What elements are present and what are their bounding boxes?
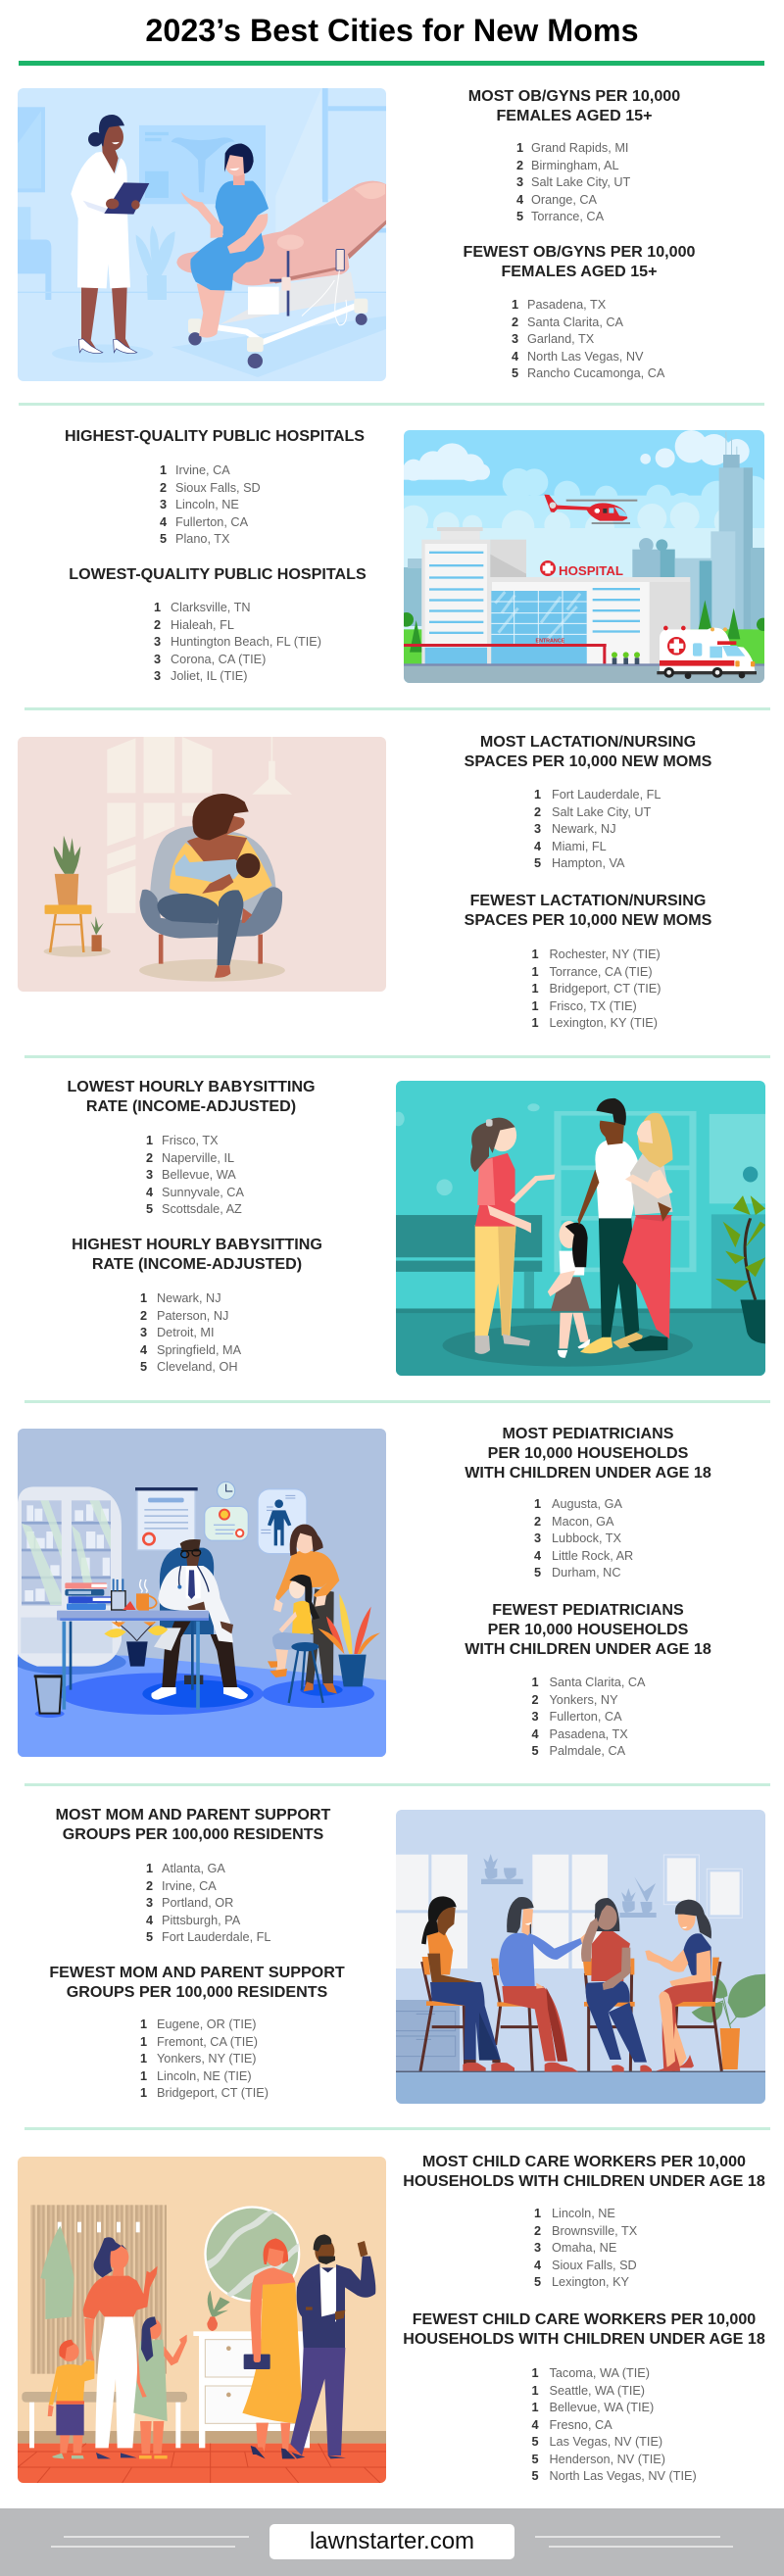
books	[65, 1582, 111, 1610]
heading: most support groups: MOST MOM AND PARENT SUPPORT	[56, 1806, 330, 1823]
heading: fewest support groups: FEWEST MOM AND PARENT SUPPORT	[49, 1964, 345, 1981]
list: fewest support groups: 1	[140, 2069, 147, 2083]
list: fewest OB/GYNs: Santa Clarita, CA	[527, 316, 623, 329]
list: most lactation spaces: 3	[534, 822, 541, 836]
list: fewest lactation spaces: 1	[531, 999, 539, 1013]
list: most lactation spaces	[534, 788, 661, 870]
list: most support groups: Pittsburgh, PA	[162, 1914, 240, 1927]
potted flower	[104, 1622, 168, 1667]
heading: most child care workers: HOUSEHOLDS WITH CHILDREN UNDER AGE 18	[403, 2172, 765, 2190]
list: fewest OB/GYNs: 1	[512, 298, 518, 312]
panel: OB/GYNs	[18, 87, 696, 381]
list: most pediatricians: Macon, GA	[552, 1515, 613, 1529]
list: fewest support groups: Lincoln, NE (TIE)	[157, 2069, 252, 2083]
list: highest babysitting rate: 1	[140, 1291, 147, 1305]
heading: most pediatricians: PER 10,000 HOUSEHOLDS	[488, 1444, 688, 1462]
panel: child care	[18, 2153, 765, 2483]
list: fewest pediatricians: 3	[531, 1710, 539, 1724]
list: most OB/GYNs: 5	[516, 210, 523, 223]
list: most pediatricians: Lubbock, TX	[552, 1531, 621, 1545]
heading: highest babysitting rate: HIGHEST HOURLY BABYSITTING	[72, 1236, 322, 1253]
panel: babysitting	[67, 1078, 765, 1376]
list: fewest lactation spaces: 1	[531, 965, 539, 979]
list: most child care workers: 1	[534, 2207, 541, 2220]
list: most pediatricians: Durham, NC	[552, 1566, 621, 1580]
dresser	[193, 2331, 310, 2448]
list: highest-quality hospitals: 5	[160, 532, 167, 546]
certificate	[205, 1506, 248, 1540]
list: most support groups: Portland, OR	[162, 1896, 233, 1910]
illustration: family with babysitter	[396, 1081, 765, 1376]
heading: most support groups: GROUPS PER 100,000 RESIDENTS	[63, 1825, 323, 1843]
list: fewest pediatricians: Yonkers, NY	[549, 1693, 618, 1707]
list: most pediatricians: Augusta, GA	[552, 1497, 622, 1511]
list: highest-quality hospitals: Lincoln, NE	[175, 498, 239, 511]
list: lowest-quality hospitals	[154, 601, 321, 683]
heading: fewest support groups: GROUPS PER 100,000 RESIDENTS	[67, 1983, 327, 2001]
list: lowest-quality hospitals: 3	[154, 669, 161, 683]
list: fewest pediatricians: 5	[531, 1744, 539, 1758]
list: most child care workers: 2	[534, 2224, 541, 2238]
list: fewest pediatricians: Pasadena, TX	[549, 1727, 628, 1741]
heading: fewest lactation spaces: FEWEST LACTATION/NURSING	[470, 892, 706, 909]
mother	[622, 1113, 672, 1351]
heading: most child care workers: MOST CHILD CARE WORKERS PER 10,000	[422, 2153, 746, 2170]
hanging coat	[40, 2226, 74, 2319]
list: fewest lactation spaces: Bridgeport, CT (TIE)	[549, 982, 661, 996]
patient	[181, 143, 269, 338]
list: most lactation spaces: 4	[534, 840, 541, 853]
heading: lowest babysitting rate: RATE (INCOME-ADJUSTED)	[86, 1097, 296, 1115]
list: most OB/GYNs	[516, 141, 630, 223]
list: most pediatricians: 3	[534, 1531, 541, 1545]
list: highest babysitting rate	[140, 1291, 241, 1374]
monstera plant	[692, 1974, 765, 2069]
list: most pediatricians	[534, 1497, 633, 1580]
list: lowest babysitting rate: Naperville, IL	[162, 1151, 234, 1165]
list: fewest lactation spaces: Frisco, TX (TIE)	[549, 999, 637, 1013]
list: fewest lactation spaces	[531, 948, 661, 1030]
list: fewest lactation spaces: Lexington, KY (TIE)	[549, 1016, 658, 1030]
list: lowest-quality hospitals: 3	[154, 635, 161, 649]
boy	[48, 2340, 94, 2458]
bench	[22, 2392, 187, 2448]
list: most support groups: Irvine, CA	[162, 1879, 217, 1893]
list: fewest support groups: Fremont, CA (TIE)	[157, 2035, 258, 2049]
doctor	[71, 115, 149, 354]
list: fewest OB/GYNs: Rancho Cucamonga, CA	[527, 366, 664, 380]
heading: most OB/GYNs: FEMALES AGED 15+	[496, 107, 653, 124]
exam chair	[176, 181, 386, 368]
list: lowest babysitting rate: Scottsdale, AZ	[162, 1202, 242, 1216]
list: fewest support groups: Bridgeport, CT (TIE)	[157, 2086, 269, 2100]
heading: most lactation spaces: SPACES PER 10,000 NEW MOMS	[465, 753, 711, 770]
list: fewest child care workers: 5	[531, 2453, 539, 2466]
list: lowest babysitting rate: 1	[146, 1134, 153, 1147]
list: most support groups: 2	[146, 1879, 153, 1893]
ambulance	[657, 626, 757, 679]
child	[548, 1221, 590, 1358]
list: most pediatricians: 2	[534, 1515, 541, 1529]
list: fewest child care workers: Fresno, CA	[549, 2418, 612, 2432]
list: fewest OB/GYNs: 3	[512, 332, 518, 346]
list: most support groups: 1	[146, 1862, 153, 1875]
list: most pediatricians: 1	[534, 1497, 541, 1511]
medicine cabinet	[18, 1486, 122, 1667]
list: highest babysitting rate: Detroit, MI	[157, 1326, 215, 1339]
list: fewest lactation spaces: Torrance, CA (TIE)	[549, 965, 653, 979]
heading: highest babysitting rate	[72, 1236, 322, 1273]
list: highest-quality hospitals	[160, 463, 261, 546]
list: fewest support groups: 1	[140, 2086, 147, 2100]
list: highest babysitting rate: Springfield, MA	[157, 1343, 241, 1357]
list: fewest lactation spaces: 1	[531, 982, 539, 996]
list: most lactation spaces: 2	[534, 805, 541, 819]
heading: fewest OB/GYNs: FEMALES AGED 15+	[501, 263, 658, 280]
potted plant	[318, 1593, 380, 1686]
list: highest babysitting rate: Cleveland, OH	[157, 1360, 238, 1374]
list: lowest-quality hospitals: Joliet, IL (TIE)	[171, 669, 247, 683]
list: lowest-quality hospitals: 3	[154, 653, 161, 666]
list: fewest OB/GYNs: North Las Vegas, NV	[527, 350, 643, 364]
list: most support groups	[146, 1862, 270, 1944]
heading: lowest babysitting rate: LOWEST HOURLY BABYSITTING	[67, 1078, 316, 1095]
heading: most pediatricians: MOST PEDIATRICIANS	[503, 1425, 673, 1442]
list: highest-quality hospitals: 4	[160, 515, 167, 529]
list: most lactation spaces: Hampton, VA	[552, 856, 625, 870]
list: fewest child care workers: 5	[531, 2435, 539, 2449]
heading: lowest-quality hospitals: LOWEST-QUALITY PUBLIC HOSPITALS	[69, 565, 367, 583]
list: most OB/GYNs: 2	[516, 159, 523, 172]
list: most lactation spaces: Salt Lake City, UT	[552, 805, 651, 819]
armchair	[139, 826, 282, 964]
list: fewest OB/GYNs: Garland, TX	[527, 332, 594, 346]
list: lowest-quality hospitals: Corona, CA (TIE)	[171, 653, 266, 666]
heading: fewest lactation spaces: SPACES PER 10,000 NEW MOMS	[465, 911, 711, 929]
list: fewest support groups: 1	[140, 2035, 147, 2049]
mother and baby	[157, 794, 272, 978]
heading: most child care workers	[403, 2153, 765, 2190]
panel: lactation	[18, 733, 711, 1030]
list: highest babysitting rate: 4	[140, 1343, 147, 1357]
list: fewest child care workers: 4	[531, 2418, 539, 2432]
list: highest babysitting rate: Paterson, NJ	[157, 1309, 228, 1323]
list: fewest child care workers: Tacoma, WA (TIE)	[549, 2366, 650, 2380]
list: most pediatricians: 5	[534, 1566, 541, 1580]
mother in white	[83, 2237, 158, 2458]
list: highest babysitting rate: Newark, NJ	[157, 1291, 221, 1305]
list: most child care workers: 4	[534, 2259, 541, 2272]
list: fewest pediatricians: Palmdale, CA	[549, 1744, 625, 1758]
panel: hospitals	[65, 427, 764, 683]
heading: highest-quality hospitals: HIGHEST-QUALITY PUBLIC HOSPITALS	[65, 427, 365, 445]
list: fewest support groups: 1	[140, 2017, 147, 2031]
list: highest-quality hospitals: 2	[160, 481, 167, 495]
list: fewest child care workers: North Las Vegas, NV (TIE)	[549, 2469, 697, 2483]
heading: most OB/GYNs: MOST OB/GYNS PER 10,000	[468, 87, 680, 105]
list: most support groups: Atlanta, GA	[162, 1862, 225, 1875]
list: lowest babysitting rate: 4	[146, 1186, 153, 1199]
list: most support groups: Fort Lauderdale, FL	[162, 1930, 270, 1944]
list: most child care workers: Omaha, NE	[552, 2241, 616, 2255]
list: most lactation spaces: 1	[534, 788, 541, 802]
list: fewest lactation spaces: Rochester, NY (TIE)	[549, 948, 661, 961]
desk	[57, 1611, 209, 1710]
title: 2023’s Best Cities for New Moms	[145, 13, 639, 48]
list: lowest-quality hospitals: Huntington Beach, FL (TIE)	[171, 635, 321, 649]
illustration: family at home	[18, 2157, 386, 2483]
list: most OB/GYNs: Torrance, CA	[531, 210, 604, 223]
plant	[715, 1195, 765, 1343]
list: most child care workers: 5	[534, 2275, 541, 2289]
list: fewest support groups: Yonkers, NY (TIE)	[157, 2052, 257, 2066]
list: fewest pediatricians: 2	[531, 1693, 539, 1707]
list: most lactation spaces: Fort Lauderdale, FL	[552, 788, 661, 802]
plant and stool	[45, 836, 104, 952]
illustration: nursing mother	[18, 737, 386, 992]
illustration: support group	[396, 1810, 765, 2104]
list: most support groups: 4	[146, 1914, 153, 1927]
list: highest babysitting rate: 2	[140, 1309, 147, 1323]
heading: most lactation spaces: MOST LACTATION/NURSING	[480, 733, 696, 751]
list: fewest OB/GYNs	[512, 298, 664, 380]
man in tuxedo	[290, 2234, 375, 2458]
list: fewest child care workers: 1	[531, 2366, 539, 2380]
heading: most support groups	[56, 1806, 331, 1843]
heading: fewest support groups	[49, 1964, 345, 2001]
list: lowest babysitting rate: 2	[146, 1151, 153, 1165]
list: lowest babysitting rate: Frisco, TX	[162, 1134, 219, 1147]
list: lowest-quality hospitals: 2	[154, 618, 161, 632]
daughter	[133, 2316, 187, 2458]
list: most pediatricians: 4	[534, 1549, 541, 1563]
heading: lowest babysitting rate	[67, 1078, 316, 1115]
heading: fewest pediatricians: FEWEST PEDIATRICIANS	[492, 1601, 684, 1619]
list: fewest lactation spaces: 1	[531, 948, 539, 961]
heading: fewest OB/GYNs: FEWEST OB/GYNS PER 10,000	[463, 243, 696, 261]
chairs	[420, 1962, 721, 2071]
list: most support groups: 5	[146, 1930, 153, 1944]
website badge: lawnstarter.com	[310, 2528, 474, 2554]
list: lowest-quality hospitals: Hialeah, FL	[171, 618, 234, 632]
list: lowest-quality hospitals: 1	[154, 601, 161, 614]
list: most OB/GYNs: Orange, CA	[531, 193, 597, 207]
heading: fewest child care workers: HOUSEHOLDS WITH CHILDREN UNDER AGE 18	[403, 2330, 765, 2348]
list: most child care workers: 3	[534, 2241, 541, 2255]
mother and child	[268, 1525, 339, 1703]
mirror	[204, 2206, 300, 2302]
list: highest babysitting rate: 3	[140, 1326, 147, 1339]
list: fewest OB/GYNs: 2	[512, 316, 518, 329]
list: most child care workers: Sioux Falls, SD	[552, 2259, 637, 2272]
list: most lactation spaces: 5	[534, 856, 541, 870]
woman 3	[581, 1898, 652, 2071]
doctor	[151, 1539, 248, 1700]
illustration: doctor and patient	[18, 88, 386, 381]
heading: most pediatricians: WITH CHILDREN UNDER AGE 18	[465, 1464, 711, 1482]
list: most OB/GYNs: Birmingham, AL	[531, 159, 619, 172]
heading: fewest pediatricians: WITH CHILDREN UNDER AGE 18	[465, 1640, 711, 1658]
heading: fewest lactation spaces	[465, 892, 711, 929]
heading: most pediatricians	[465, 1425, 711, 1482]
list: fewest child care workers: Seattle, WA (TIE)	[549, 2384, 645, 2398]
panel: support groups	[49, 1806, 765, 2104]
list: highest-quality hospitals: Plano, TX	[175, 532, 229, 546]
list: fewest child care workers	[531, 2366, 697, 2483]
list: fewest child care workers: Las Vegas, NV (TIE)	[549, 2435, 662, 2449]
father	[577, 1098, 643, 1353]
pen cup and mug	[112, 1579, 157, 1611]
heading: fewest child care workers	[403, 2310, 765, 2348]
list: highest-quality hospitals: 1	[160, 463, 167, 477]
list: most child care workers: Lexington, KY	[552, 2275, 629, 2289]
list: fewest child care workers: Henderson, NV (TIE)	[549, 2453, 665, 2466]
woman 1	[421, 1896, 514, 2071]
illustration: pediatrician office	[18, 1429, 386, 1757]
list: most lactation spaces: Miami, FL	[552, 840, 607, 853]
list: fewest child care workers: 1	[531, 2401, 539, 2414]
list: most child care workers: Lincoln, NE	[552, 2207, 615, 2220]
woman 4	[645, 1900, 712, 2071]
heading: highest babysitting rate: RATE (INCOME-ADJUSTED)	[92, 1255, 302, 1273]
list: most OB/GYNs: 1	[516, 141, 523, 155]
list: lowest-quality hospitals: Clarksville, TN	[171, 601, 251, 614]
footer	[0, 2508, 784, 2576]
heading: fewest OB/GYNs	[463, 243, 696, 280]
list: fewest OB/GYNs: 5	[512, 366, 518, 380]
list: most OB/GYNs: 3	[516, 175, 523, 189]
list: fewest child care workers: Bellevue, WA (TIE)	[549, 2401, 654, 2414]
helicopter	[544, 495, 637, 524]
list: lowest babysitting rate: Bellevue, WA	[162, 1168, 236, 1182]
list: lowest babysitting rate: 3	[146, 1168, 153, 1182]
hospital building	[404, 527, 690, 665]
list: most OB/GYNs: 4	[516, 193, 523, 207]
woman 2	[499, 1897, 587, 2071]
list: fewest lactation spaces: 1	[531, 1016, 539, 1030]
list: most OB/GYNs: Grand Rapids, MI	[531, 141, 628, 155]
list: fewest pediatricians: 1	[531, 1676, 539, 1689]
list: most lactation spaces: Newark, NJ	[552, 822, 616, 836]
heading: fewest pediatricians: PER 10,000 HOUSEHOLDS	[488, 1621, 688, 1638]
list: highest-quality hospitals: 3	[160, 498, 167, 511]
list: fewest pediatricians: Fullerton, CA	[549, 1710, 622, 1724]
list: fewest support groups	[140, 2017, 269, 2100]
list: most child care workers	[534, 2207, 637, 2289]
list: highest babysitting rate: 5	[140, 1360, 147, 1374]
illustration: hospital	[404, 430, 764, 683]
heading: fewest pediatricians	[465, 1601, 711, 1658]
website badge	[270, 2524, 514, 2559]
vase	[207, 2291, 230, 2331]
list: fewest support groups: 1	[140, 2052, 147, 2066]
list: fewest support groups: Eugene, OR (TIE)	[157, 2017, 257, 2031]
list: highest-quality hospitals: Sioux Falls, SD	[175, 481, 261, 495]
trash bin	[34, 1675, 65, 1718]
list: fewest pediatricians: Santa Clarita, CA	[549, 1676, 646, 1689]
list: fewest child care workers: 5	[531, 2469, 539, 2483]
list: fewest pediatricians: 4	[531, 1727, 539, 1741]
list: fewest child care workers: 1	[531, 2384, 539, 2398]
list: most OB/GYNs: Salt Lake City, UT	[531, 175, 630, 189]
anatomy chart	[258, 1489, 307, 1554]
heading: most lactation spaces	[465, 733, 711, 770]
heading: fewest child care workers: FEWEST CHILD CARE WORKERS PER 10,000	[413, 2310, 756, 2328]
babysitter	[470, 1118, 555, 1354]
list: most support groups: 3	[146, 1896, 153, 1910]
list: highest-quality hospitals: Irvine, CA	[175, 463, 230, 477]
heading: most OB/GYNs	[468, 87, 680, 124]
list: most pediatricians: Little Rock, AR	[552, 1549, 633, 1563]
list: fewest OB/GYNs: 4	[512, 350, 518, 364]
list: highest-quality hospitals: Fullerton, CA	[175, 515, 248, 529]
hospital building: ENTRANCE	[536, 639, 565, 645]
list: fewest OB/GYNs: Pasadena, TX	[527, 298, 606, 312]
list: fewest pediatricians	[531, 1676, 646, 1758]
woman in yellow dress	[242, 2238, 302, 2458]
hospital building: HOSPITAL	[559, 563, 623, 578]
list: lowest babysitting rate: 5	[146, 1202, 153, 1216]
wall poster	[135, 1487, 198, 1550]
list: lowest babysitting rate: Sunnyvale, CA	[162, 1186, 244, 1199]
panel: pediatricians	[18, 1425, 711, 1758]
clock	[218, 1482, 235, 1499]
list: most child care workers: Brownsville, TX	[552, 2224, 637, 2238]
list: lowest babysitting rate	[146, 1134, 244, 1216]
